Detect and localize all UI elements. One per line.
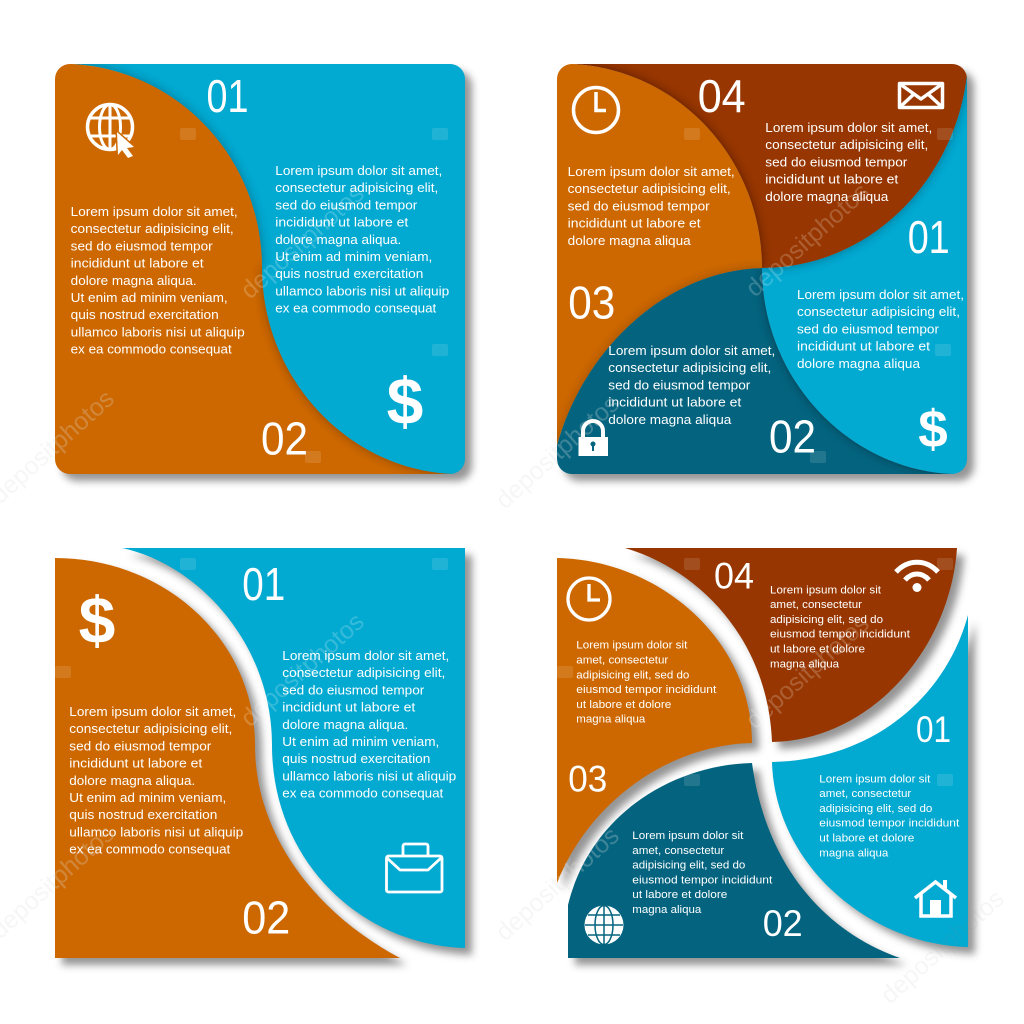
cyan segment 01 bbox=[762, 75, 967, 474]
text: orange body: magna aliqua bbox=[576, 714, 646, 726]
text: orange body: Ut enim ad minim veniam, bbox=[69, 790, 226, 805]
text: cyan body: Lorem ipsum dolor sit amet, bbox=[282, 648, 449, 663]
text: orange body: sed do eiusmod tempor bbox=[71, 238, 213, 253]
number 03: 03 bbox=[568, 759, 607, 800]
text: cyan body bbox=[282, 648, 456, 801]
text: cyan body: adipisicing elit, sed do bbox=[819, 803, 932, 815]
icon: dollar: $ bbox=[387, 364, 423, 438]
text: cyan body: eiusmod tempor incididunt bbox=[819, 818, 959, 830]
text: orange body: ut labore et dolore bbox=[576, 699, 671, 711]
text: brown body: sed do eiusmod tempor bbox=[765, 154, 908, 169]
brown segment 04 bbox=[625, 548, 957, 742]
text: cyan body bbox=[275, 163, 449, 316]
text: orange body: ex ea commodo consequat bbox=[71, 342, 232, 357]
text: orange body: Lorem ipsum dolor sit amet, bbox=[71, 204, 238, 219]
text: teal body bbox=[632, 830, 772, 916]
number 01: 01 bbox=[242, 558, 285, 610]
text: teal body: eiusmod tempor incididunt bbox=[632, 874, 772, 886]
number 02: 02 bbox=[769, 411, 816, 463]
text: orange body: incididunt ut labore et bbox=[69, 756, 203, 771]
text: cyan body: ex ea commodo consequat bbox=[275, 301, 437, 316]
text: orange body: incididunt ut labore et bbox=[568, 216, 701, 231]
text: cyan body: consectetur adipisicing elit, bbox=[275, 180, 438, 195]
text: cyan body bbox=[797, 287, 964, 371]
watermarks: depositphotos bbox=[875, 884, 1010, 1009]
text: orange body: ullamco laboris nisi ut aliquip bbox=[69, 824, 243, 839]
text: orange body: quis nostrud exercitation bbox=[69, 807, 217, 822]
panel: two-part rounded S-curve bbox=[55, 50, 480, 490]
watermarks: depositphotos bbox=[740, 177, 875, 302]
text: brown body: magna aliqua bbox=[770, 658, 840, 670]
icon: briefcase bbox=[386, 844, 442, 892]
text: orange body: eiusmod tempor incididunt bbox=[576, 684, 716, 696]
text: cyan body: Ut enim ad minim veniam, bbox=[282, 734, 439, 749]
inner shadow on brown bbox=[557, 64, 762, 268]
text: cyan body: sed do eiusmod tempor bbox=[282, 682, 425, 697]
text: brown body: Lorem ipsum dolor sit bbox=[770, 584, 881, 596]
text: brown body: amet, consectetur bbox=[770, 599, 862, 611]
icon: padlock bbox=[578, 421, 608, 456]
text: orange body bbox=[69, 704, 243, 857]
text: brown body: eiusmod tempor incididunt bbox=[770, 629, 910, 641]
icon: dollar: $ bbox=[79, 583, 115, 657]
text: teal body: Lorem ipsum dolor sit amet, bbox=[608, 343, 775, 358]
text: cyan body: magna aliqua bbox=[819, 847, 889, 859]
text: cyan body: dolore magna aliqua bbox=[797, 356, 921, 371]
text: teal body: amet, consectetur bbox=[632, 845, 725, 857]
panel: four-part separated pinwheel bbox=[557, 548, 975, 965]
number 04: 04 bbox=[698, 70, 746, 122]
text: brown body: Lorem ipsum dolor sit amet, bbox=[765, 120, 932, 135]
text: cyan body: sed do eiusmod tempor bbox=[797, 321, 940, 336]
icon: clock bbox=[568, 578, 610, 620]
icon: clock bbox=[574, 88, 618, 132]
text: cyan body: ex ea commodo consequat bbox=[282, 786, 444, 801]
text: teal body: dolore magna aliqua bbox=[608, 412, 732, 427]
inner shadow on orange bbox=[557, 264, 762, 444]
watermarks: depositphotos bbox=[235, 179, 370, 304]
text: cyan body: quis nostrud exercitation bbox=[275, 266, 423, 281]
panel: four-part rounded pinwheel bbox=[557, 64, 974, 481]
cyan segment 01 bbox=[72, 64, 465, 474]
watermarks: depositphotos bbox=[490, 389, 625, 514]
inner shadow on cyan bbox=[73, 64, 267, 270]
number 03: 03 bbox=[568, 277, 615, 329]
panel: two-part separated S-curve bbox=[55, 548, 472, 965]
text: orange body: Lorem ipsum dolor sit amet, bbox=[69, 704, 236, 719]
number 04: 04 bbox=[714, 555, 754, 596]
watermarks: depositphotos bbox=[235, 607, 370, 732]
text: cyan body: ut labore et dolore bbox=[819, 832, 914, 844]
text: brown body: dolore magna aliqua bbox=[765, 189, 889, 204]
text: orange body: dolore magna aliqua. bbox=[71, 273, 197, 288]
text: orange body bbox=[576, 640, 716, 726]
icon: house bbox=[915, 880, 956, 916]
text: cyan body: incididunt ut labore et bbox=[282, 700, 416, 715]
text: cyan body: sed do eiusmod tempor bbox=[275, 197, 418, 212]
text: orange body bbox=[71, 204, 245, 357]
text: orange body: ex ea commodo consequat bbox=[69, 842, 231, 857]
icon: globe with cursor bbox=[88, 104, 134, 158]
orange segment 02 bbox=[55, 558, 400, 958]
watermarks: depositphotos bbox=[740, 609, 875, 734]
inner shadow on teal bbox=[762, 268, 967, 474]
text: cyan body: Ut enim ad minim veniam, bbox=[275, 249, 432, 264]
text: orange body: dolore magna aliqua. bbox=[69, 773, 195, 788]
text: orange body: dolore magna aliqua bbox=[568, 233, 691, 248]
text: orange body: Lorem ipsum dolor sit amet, bbox=[568, 164, 735, 179]
text: cyan body: Lorem ipsum dolor sit bbox=[819, 773, 930, 785]
text: cyan body: consectetur adipisicing elit, bbox=[282, 665, 445, 680]
text: cyan body bbox=[819, 773, 959, 859]
text: brown body bbox=[770, 584, 910, 670]
text: cyan body: ullamco laboris nisi ut aliquip bbox=[282, 768, 456, 783]
orange segment 03 bbox=[557, 558, 752, 883]
text: orange body: ullamco laboris nisi ut aliquip bbox=[71, 324, 245, 339]
text: cyan body: dolore magna aliqua. bbox=[282, 717, 408, 732]
text: cyan body: incididunt ut labore et bbox=[275, 215, 409, 230]
text: brown body: incididunt ut labore et bbox=[765, 172, 899, 187]
text: cyan body: incididunt ut labore et bbox=[797, 339, 930, 354]
text: cyan body: quis nostrud exercitation bbox=[282, 751, 430, 766]
shadow under all segments bbox=[564, 555, 975, 965]
text: orange body: amet, consectetur bbox=[576, 654, 669, 666]
icon: globe bbox=[584, 905, 624, 945]
icon: envelope bbox=[900, 84, 942, 108]
shadow under both segments bbox=[62, 555, 472, 965]
text: cyan body: amet, consectetur bbox=[819, 788, 912, 800]
panel shadow bbox=[62, 71, 472, 481]
text: brown body: ut labore et dolore bbox=[770, 644, 865, 656]
text: orange body: incididunt ut labore et bbox=[71, 256, 204, 271]
text: orange body: adipisicing elit, sed do bbox=[576, 669, 689, 681]
teal segment 02 bbox=[557, 268, 952, 474]
icon: dollar: $ bbox=[918, 400, 948, 459]
text: cyan body: Lorem ipsum dolor sit amet, bbox=[797, 287, 964, 302]
text: teal body: sed do eiusmod tempor bbox=[608, 377, 751, 392]
cyan segment 01 bbox=[122, 548, 465, 948]
text: orange body: consectetur adipisicing elit, bbox=[71, 221, 234, 236]
text: orange body: quis nostrud exercitation bbox=[71, 307, 219, 322]
text: orange body: sed do eiusmod tempor bbox=[69, 738, 212, 753]
text: brown body: adipisicing elit, sed do bbox=[770, 614, 883, 626]
text: orange body: sed do eiusmod tempor bbox=[568, 198, 710, 213]
orange segment 03 bbox=[557, 64, 762, 445]
orange segment 02 bbox=[55, 64, 452, 474]
number 01: 01 bbox=[916, 709, 951, 750]
text: cyan body: dolore magna aliqua. bbox=[275, 232, 401, 247]
icon: wifi bbox=[896, 562, 938, 592]
text: orange body: consectetur adipisicing elit, bbox=[568, 181, 731, 196]
text: brown body bbox=[765, 120, 932, 204]
watermarks: depositphotos bbox=[490, 389, 625, 514]
text: brown body: consectetur adipisicing elit, bbox=[765, 137, 928, 152]
cyan segment 01 bbox=[772, 615, 968, 947]
text: teal body: magna aliqua bbox=[632, 904, 702, 916]
text: orange body: Ut enim ad minim veniam, bbox=[71, 290, 228, 305]
brown segment 04 bbox=[573, 64, 967, 268]
panel shadow bbox=[564, 71, 974, 481]
text: orange body: Lorem ipsum dolor sit bbox=[576, 640, 687, 652]
text: cyan body: Lorem ipsum dolor sit amet, bbox=[275, 163, 442, 178]
teal segment 02 bbox=[568, 763, 900, 958]
text: teal body: consectetur adipisicing elit, bbox=[608, 360, 771, 375]
text: orange body bbox=[568, 164, 735, 248]
text: cyan body: ullamco laboris nisi ut aliquip bbox=[275, 283, 449, 298]
text: teal body: adipisicing elit, sed do bbox=[632, 860, 745, 872]
number 02: 02 bbox=[261, 412, 308, 464]
text: teal body bbox=[608, 343, 775, 427]
watermark camera marks bbox=[55, 128, 953, 786]
text: cyan body: consectetur adipisicing elit, bbox=[797, 304, 960, 319]
watermarks: depositphotos bbox=[490, 821, 625, 946]
number 01: 01 bbox=[908, 211, 950, 263]
text: teal body: Lorem ipsum dolor sit bbox=[632, 830, 743, 842]
watermarks: depositphotos bbox=[490, 821, 625, 946]
inner shadow on cyan bbox=[762, 64, 967, 268]
text: teal body: ut labore et dolore bbox=[632, 889, 727, 901]
number 02: 02 bbox=[763, 903, 803, 944]
number 02: 02 bbox=[242, 891, 290, 943]
text: orange body: consectetur adipisicing elit, bbox=[69, 721, 232, 736]
inner shadow on orange bbox=[256, 264, 450, 474]
text: teal body: incididunt ut labore et bbox=[608, 395, 742, 410]
number 01: 01 bbox=[206, 70, 248, 122]
